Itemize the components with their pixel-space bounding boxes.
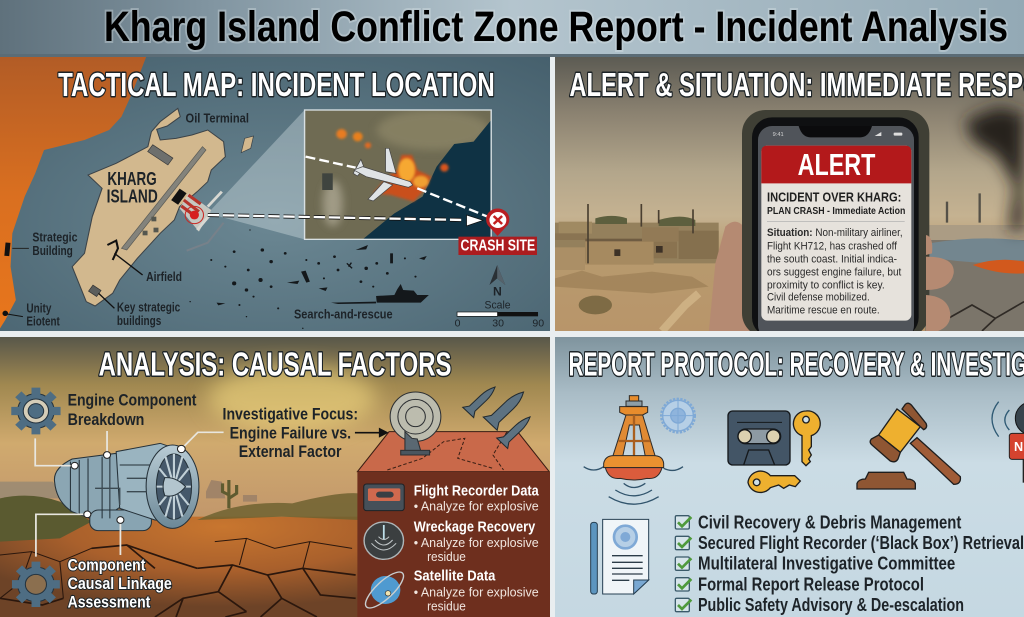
icon: black box	[728, 411, 790, 465]
mainland coast	[0, 57, 146, 328]
wreckage recovery item: • Analyze for explosive	[414, 535, 539, 550]
plane	[353, 148, 413, 201]
map labels: Strategic	[32, 230, 77, 245]
radar dish	[390, 392, 441, 455]
alert card: PLAN CRASH - Immediate Action	[767, 206, 905, 217]
icon: news microphone: N	[1014, 440, 1023, 454]
smoke plume	[965, 107, 1024, 230]
satellite data item: residue	[427, 599, 466, 613]
checklist: Civil Recovery & Debris Management	[698, 512, 961, 532]
icon: vertical key	[793, 411, 820, 466]
icon: UN report document	[591, 519, 649, 594]
flight path in inset	[306, 157, 488, 217]
alert card	[761, 146, 911, 321]
gear icon top	[11, 388, 61, 434]
icon: gavel	[857, 403, 960, 489]
map labels: Oil Terminal	[186, 111, 249, 126]
north arrow and scale: Scale	[485, 299, 511, 311]
breakwater	[187, 223, 224, 251]
map labels: Eiotent	[26, 314, 60, 329]
rescue boat	[331, 284, 429, 304]
missiles	[463, 382, 536, 448]
map labels: Search-and-rescue	[294, 307, 393, 321]
debris field	[189, 229, 427, 329]
satellite data item	[360, 567, 539, 613]
map labels: Key strategic	[117, 300, 180, 315]
flight path arrow	[208, 215, 483, 226]
panel: report protocol	[555, 337, 1024, 617]
engine callouts	[35, 431, 224, 557]
engine labels: Assessment	[68, 592, 151, 612]
phone: 9:41	[773, 132, 784, 138]
crash site pin	[458, 208, 537, 255]
island	[72, 108, 254, 306]
cracked ground	[0, 538, 356, 617]
desert background	[0, 480, 359, 617]
investigative focus text with arrow	[223, 404, 389, 461]
sun glow	[208, 365, 377, 432]
fires	[336, 129, 449, 202]
checklist: Multilateral Investigative Committee	[698, 554, 955, 574]
village	[555, 204, 719, 331]
icon: UN emblem	[661, 399, 695, 432]
alert card: Flight KH712, has crashed off	[767, 240, 897, 252]
alert card: proximity to conflict is key.	[767, 279, 885, 291]
fingers	[926, 235, 954, 333]
icon: buoy	[584, 396, 683, 504]
north arrow and scale: 90	[532, 319, 544, 330]
wreckage recovery item	[364, 519, 539, 564]
map labels: Unity	[26, 301, 52, 315]
terrain block	[357, 432, 550, 617]
flight recorder item: • Analyze for explosive	[414, 499, 539, 514]
alert card: Maritime rescue en route.	[767, 304, 880, 316]
wreckage recovery item: residue	[427, 549, 466, 564]
beam from island to inset	[208, 110, 305, 239]
north arrow and scale: 30	[492, 319, 504, 330]
alert card: Civil defense mobilized.	[767, 292, 870, 304]
north arrow and scale: N	[493, 285, 502, 298]
satellite data item: • Analyze for explosive	[414, 585, 539, 600]
engine labels: Engine Component	[68, 390, 197, 410]
map labels	[2, 111, 393, 329]
title band	[0, 0, 1024, 57]
icon: horizontal key	[748, 471, 800, 492]
right side scorched ground	[925, 193, 1024, 333]
alert card: INCIDENT OVER KHARG:	[767, 191, 901, 205]
panel: alert and situation	[555, 57, 1024, 331]
alert card: ors suggest engine failure, but	[767, 266, 901, 278]
checklist: Formal Report Release Protocol	[698, 574, 924, 594]
alert card: the south coast. Initial indica-	[767, 253, 897, 265]
island label: KHARG	[107, 169, 157, 190]
panel: tactical map	[0, 57, 550, 331]
alert card: Situation: Non-military airliner,	[767, 227, 903, 239]
map labels: Airfield	[146, 269, 182, 284]
map labels: buildings	[117, 313, 161, 328]
crash zone marker	[180, 192, 222, 232]
satellite data item: Satellite Data	[414, 568, 496, 585]
map labels: Building	[32, 243, 73, 258]
investigative focus text with arrow: External Factor	[239, 441, 342, 461]
engine	[54, 443, 199, 531]
icon: news microphone	[992, 402, 1024, 483]
island label	[107, 169, 158, 207]
investigative focus text with arrow: Investigative Focus:	[223, 404, 358, 424]
engine labels: Causal Linkage	[68, 573, 172, 593]
inset satellite photo	[305, 110, 491, 239]
panel: causal analysis	[0, 337, 550, 617]
engine labels: Component	[68, 555, 146, 574]
island label: ISLAND	[107, 187, 158, 207]
gear icon bottom	[12, 562, 60, 607]
flight recorder item	[364, 483, 539, 514]
engine labels: Breakdown	[68, 409, 144, 429]
checklist: Public Safety Advisory & De-escalation	[698, 595, 964, 615]
phone	[742, 110, 929, 339]
engine labels	[68, 390, 197, 612]
north arrow and scale: 0	[455, 319, 461, 330]
thumb	[709, 222, 752, 333]
north arrow and scale	[455, 265, 544, 330]
alert card: ALERT	[798, 148, 876, 182]
investigative focus text with arrow: Engine Failure vs.	[230, 423, 351, 442]
checklist	[675, 512, 1024, 615]
